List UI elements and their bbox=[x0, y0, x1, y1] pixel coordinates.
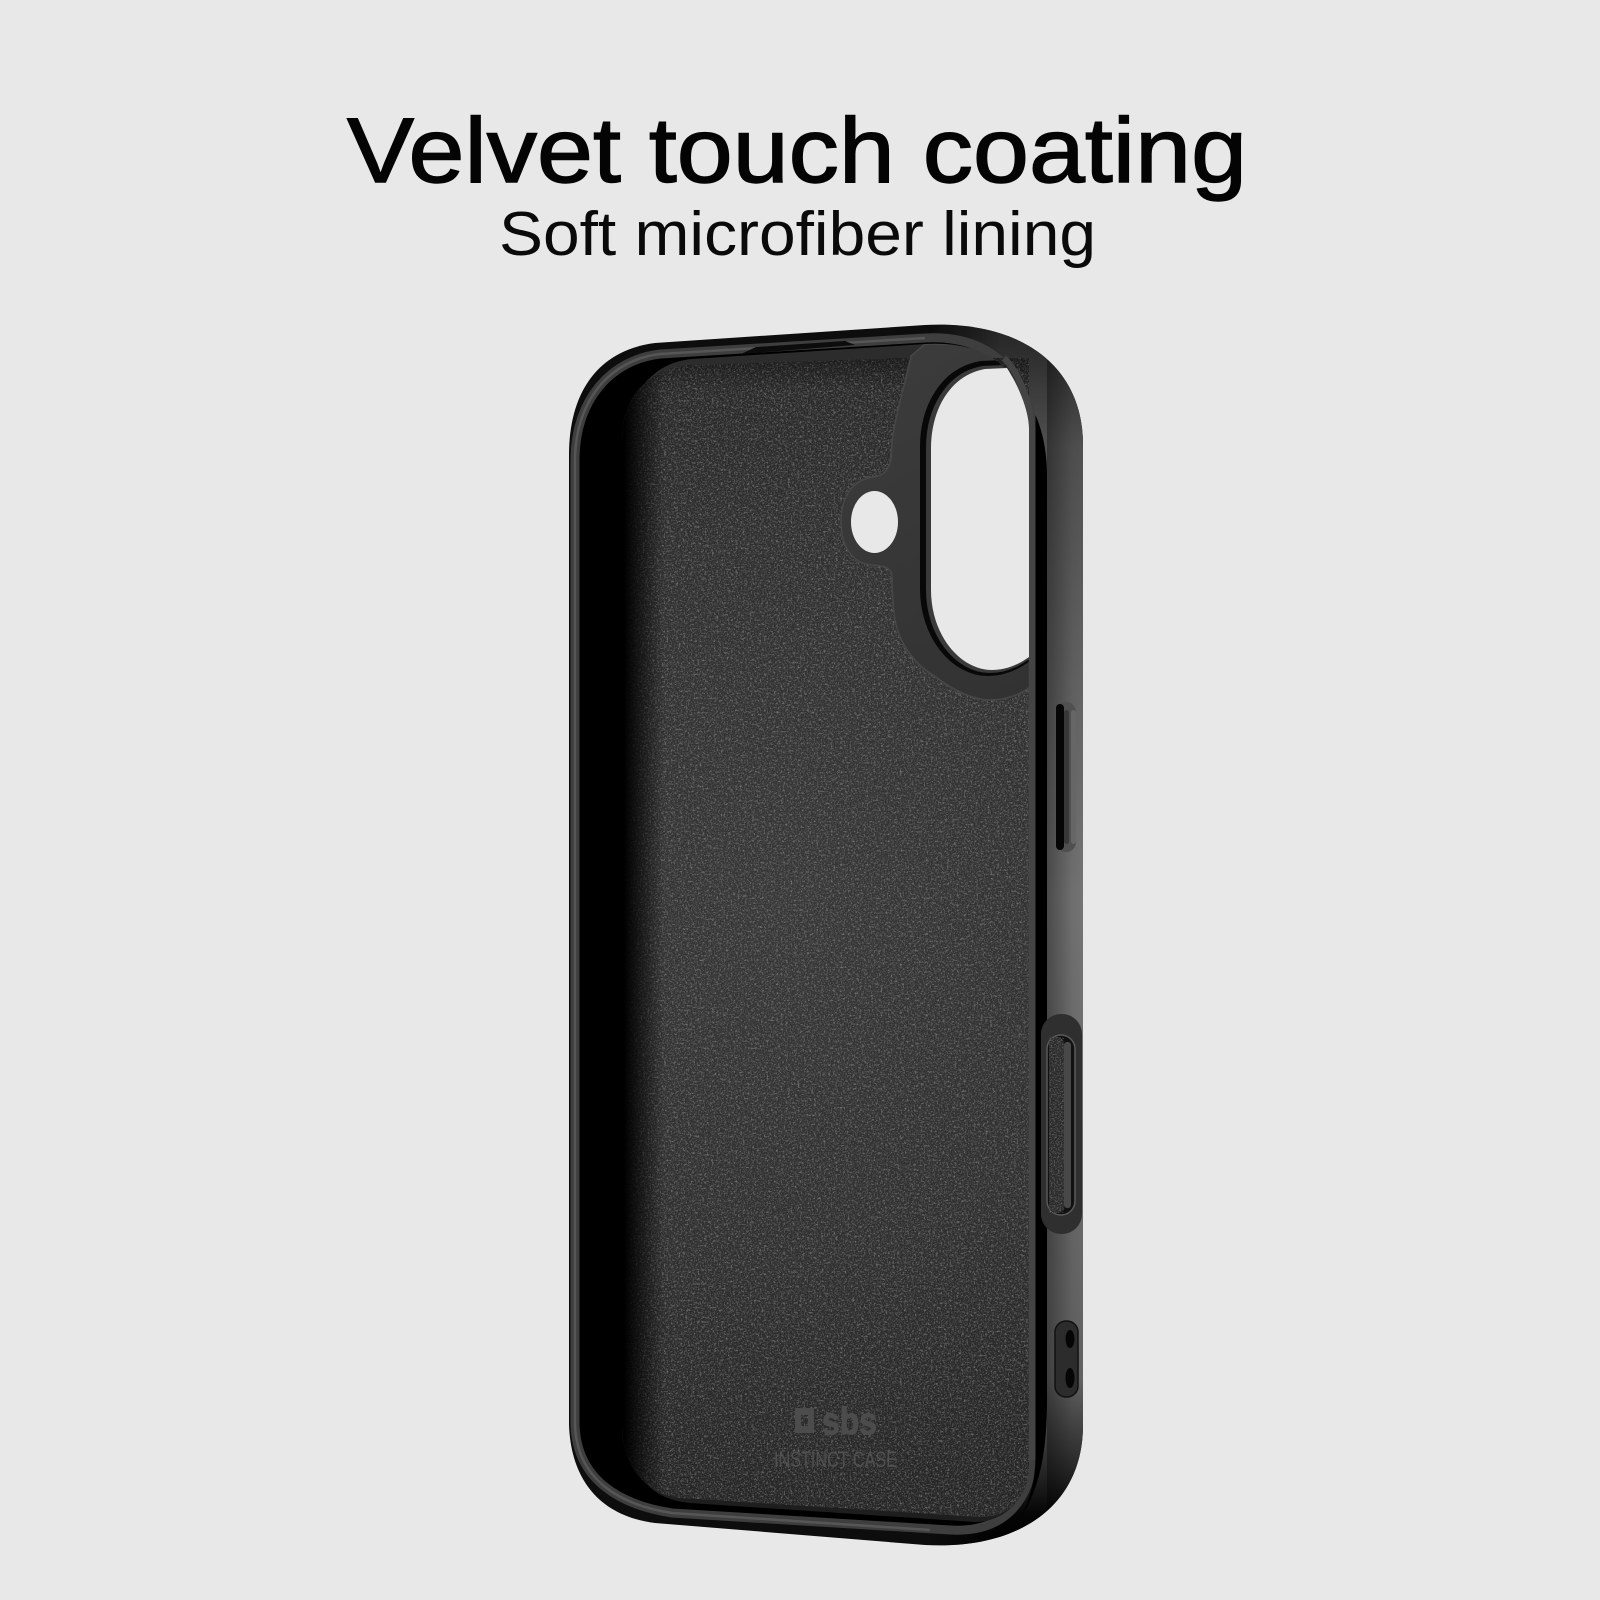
bottom inner wall bbox=[632, 1440, 1029, 1522]
right inner rim strip bbox=[1004, 358, 1032, 1460]
phone case bbox=[569, 320, 1090, 1550]
charging port pill bbox=[1055, 1321, 1078, 1397]
logo square icon bbox=[795, 1408, 814, 1433]
main camera hole inner stripe bbox=[929, 368, 1027, 670]
rim highlight bbox=[575, 338, 930, 1530]
top inner wall bbox=[628, 344, 1029, 440]
right side wall bbox=[941, 324, 1083, 1546]
tagline: instinct case: INSTINCT CASE bbox=[774, 1447, 897, 1472]
volume button bbox=[1056, 702, 1076, 852]
secondary camera hole bbox=[851, 491, 898, 553]
title: Velvet touch coating bbox=[347, 100, 1247, 202]
top button recess bbox=[741, 341, 855, 354]
logo wordmark: sbs bbox=[822, 1401, 877, 1443]
subtitle: Soft microfiber lining bbox=[499, 200, 1096, 269]
case outer shell bbox=[569, 325, 1083, 1545]
right black strip bbox=[1020, 415, 1047, 1518]
camera island bbox=[841, 344, 1032, 700]
microfiber lining bbox=[615, 350, 1035, 1525]
case opening and front rim bbox=[575, 338, 1033, 1530]
main camera hole shadow ring bbox=[927, 367, 1025, 669]
action button cutout bbox=[1041, 1014, 1082, 1234]
main camera hole bbox=[931, 368, 1029, 670]
logo: sbs bbox=[795, 1401, 877, 1443]
